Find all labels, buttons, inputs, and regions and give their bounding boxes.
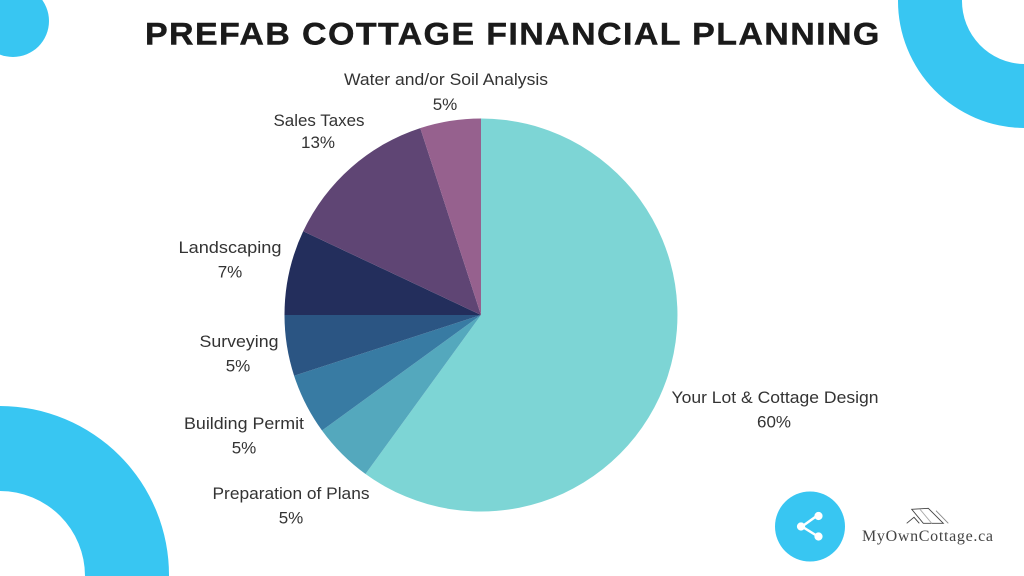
label: Surveying: 5% bbox=[226, 356, 250, 376]
logo: MyOwnCottage.ca: MyOwnCottage.ca bbox=[862, 528, 993, 545]
label: Landscaping: 7% bbox=[218, 262, 242, 282]
share button bbox=[775, 492, 845, 562]
slice: Your Lot & Cottage Design 60% bbox=[366, 118, 677, 511]
label: Your Lot & Cottage Design: Your Lot & Cottage Design bbox=[672, 388, 878, 407]
decorative arc bottom left bbox=[0, 406, 169, 576]
label: Landscaping: Landscaping bbox=[178, 238, 282, 257]
icon: share bbox=[797, 512, 822, 540]
pie chart bbox=[284, 118, 677, 511]
slice: Building Permit 5% bbox=[294, 315, 481, 430]
label: Water and/or Soil Analysis: Water and/or Soil Analysis bbox=[344, 70, 548, 89]
slice: Preparation of Plans 5% bbox=[322, 315, 481, 474]
label: Surveying: Surveying bbox=[200, 332, 278, 351]
icon: cottage roofs bbox=[907, 508, 948, 523]
slice: Sales Taxes 13% bbox=[303, 128, 481, 315]
label: Your Lot & Cottage Design: 60% bbox=[757, 412, 791, 432]
label: Building Permit: 5% bbox=[232, 438, 256, 458]
slice: Surveying 5% bbox=[284, 315, 481, 376]
label: Sales Taxes: Sales Taxes bbox=[274, 111, 364, 130]
decorative circle top left bbox=[0, 0, 49, 57]
logo: MyOwnCottage.ca bbox=[862, 508, 993, 545]
title: PREFAB COTTAGE FINANCIAL PLANNING bbox=[145, 16, 879, 51]
slice: Landscaping 7% bbox=[284, 231, 481, 315]
label: Sales Taxes: 13% bbox=[301, 133, 335, 152]
decorative arc top right bbox=[898, 0, 1024, 128]
label: Building Permit: Building Permit bbox=[184, 414, 304, 433]
label: Preparation of Plans: 5% bbox=[279, 508, 303, 528]
label: Preparation of Plans: Preparation of Plans bbox=[212, 484, 370, 503]
label: Water and/or Soil Analysis: 5% bbox=[433, 95, 457, 114]
slice: Water and/or Soil Analysis 5% bbox=[420, 118, 481, 315]
